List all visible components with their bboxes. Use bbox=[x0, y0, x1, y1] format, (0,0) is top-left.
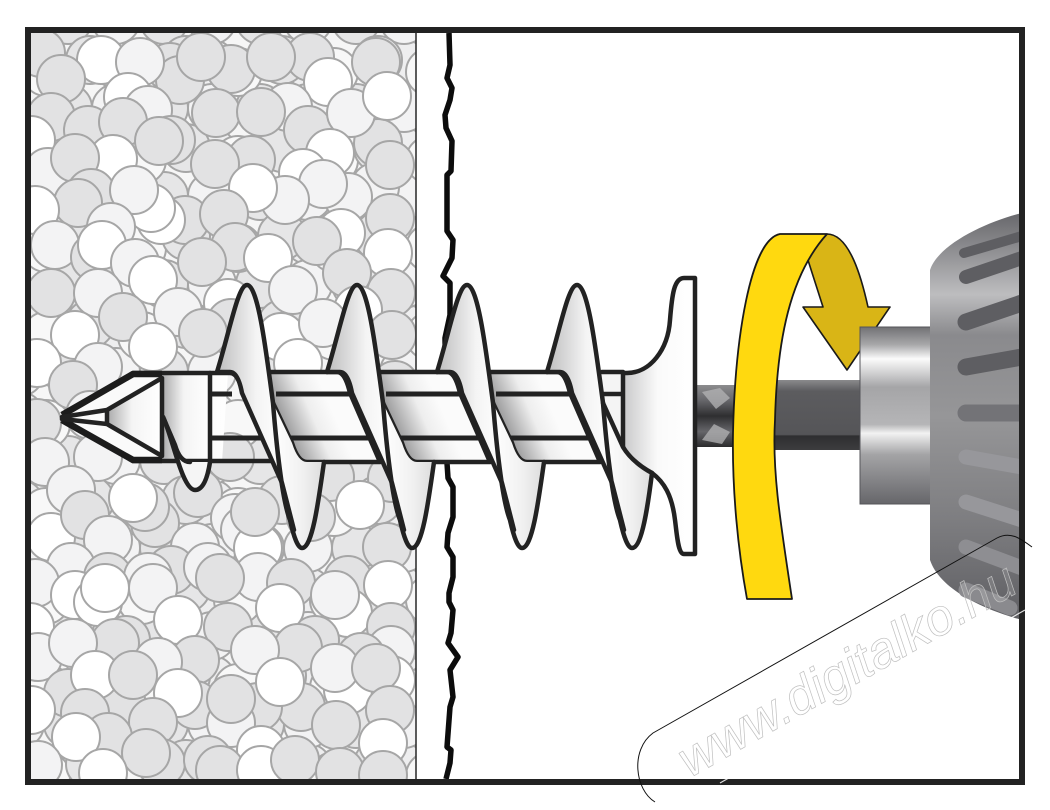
rotation arrow: rear shaded part bbox=[803, 234, 890, 370]
chuck nose bbox=[860, 327, 931, 504]
anchor rear band bbox=[600, 372, 623, 447]
chuck body with ridges bbox=[930, 213, 1022, 620]
drill chuck bbox=[860, 213, 1022, 620]
watermark: www.digitalko.hu bbox=[667, 551, 1026, 788]
wall crack line bbox=[443, 33, 458, 779]
screw anchor bbox=[62, 278, 695, 554]
drill bit bbox=[696, 380, 861, 450]
helix fins bbox=[217, 285, 324, 548]
last helix fin joining flange bbox=[547, 285, 652, 548]
helix bands bbox=[270, 372, 380, 462]
small lower fin bbox=[163, 417, 210, 490]
pointed tip bbox=[62, 373, 162, 460]
wall board edge bbox=[415, 33, 417, 779]
panel: insulation beads bbox=[6, 29, 419, 799]
rotation arrow: front yellow band bbox=[733, 234, 827, 599]
anchor flange bbox=[620, 278, 695, 554]
anchor nose section bbox=[133, 373, 228, 462]
